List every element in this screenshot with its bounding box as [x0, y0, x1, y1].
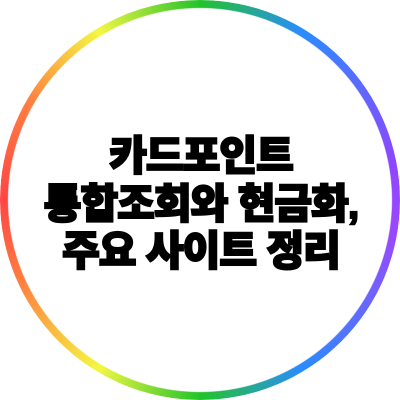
- title: [44, 133, 358, 274]
- title line 3: 주요 사이트 정리: [62, 228, 340, 274]
- title line 2: 통합조회와 현금화,: [44, 180, 358, 226]
- title line 1: 카드포인트: [109, 133, 293, 179]
